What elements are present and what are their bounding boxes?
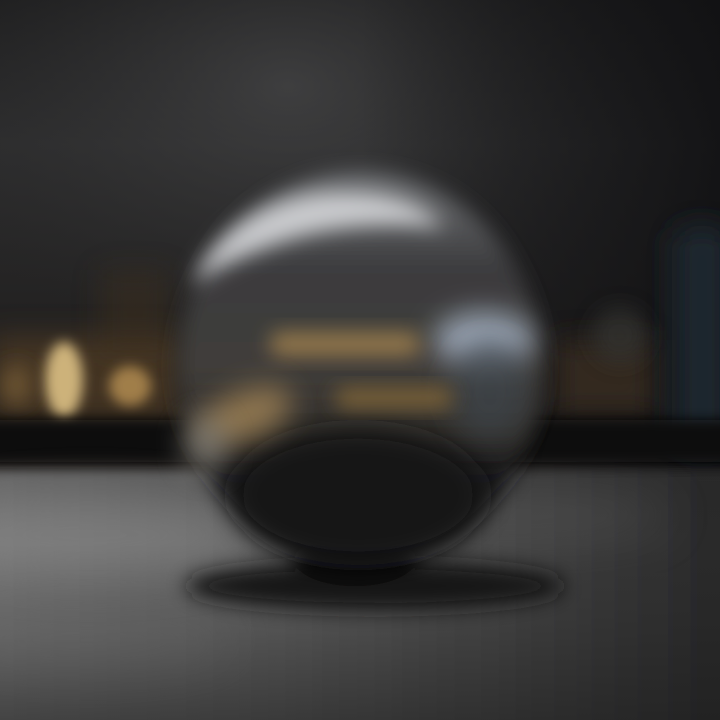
sphere: lower gold reflection (335, 388, 453, 408)
sphere: dark lower hemisphere (233, 429, 483, 561)
distant dim buildings, right (555, 225, 720, 450)
sphere: top white highlight (192, 192, 445, 285)
background wall (0, 0, 720, 480)
floor surface (0, 468, 720, 720)
sphere shadow (185, 534, 565, 610)
sphere (178, 172, 542, 564)
dark horizon band (0, 420, 720, 462)
sphere: blue-white reflection (434, 312, 534, 368)
distant warm city lights, left (0, 270, 180, 420)
sphere: pale left glow (183, 417, 227, 473)
sphere: left gold reflection (190, 374, 300, 456)
sphere: upper gold reflection (270, 332, 420, 356)
